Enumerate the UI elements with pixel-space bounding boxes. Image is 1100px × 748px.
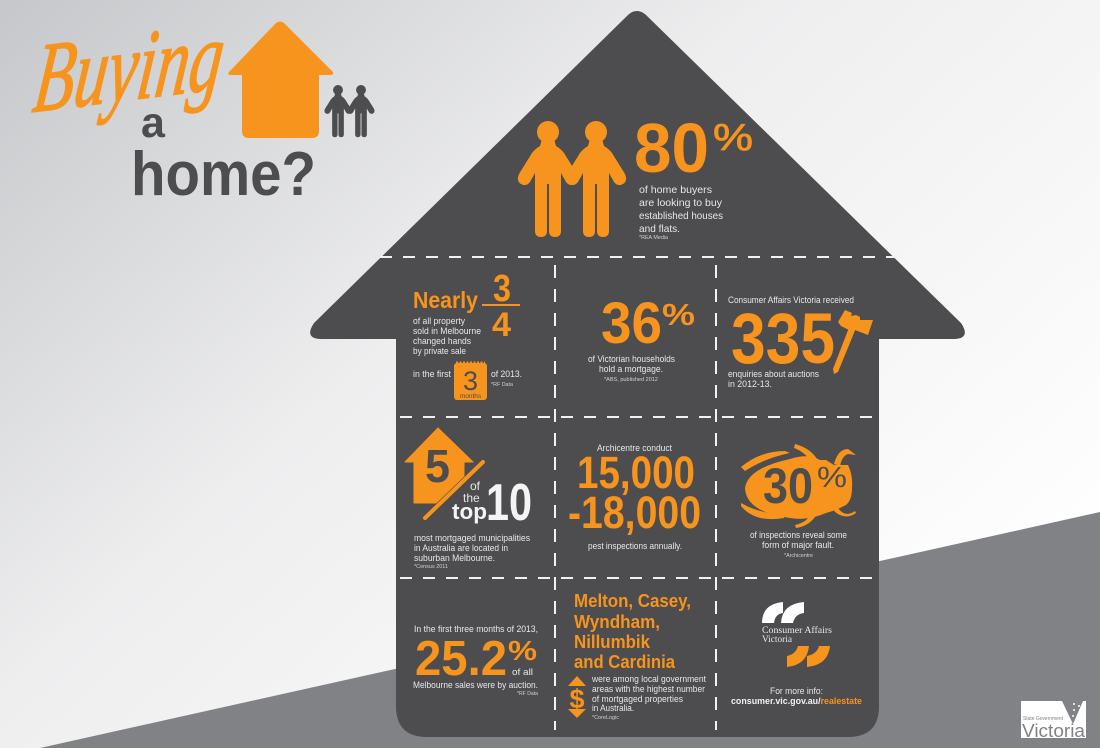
ground slope: [40, 512, 1100, 748]
text: of the top 10: the: [463, 491, 480, 505]
text block: of home buyers: [639, 184, 712, 196]
fraction: 3/4: 3: [493, 268, 511, 310]
text block: and flats.: [639, 223, 680, 235]
text block: enquiries about auctions: [728, 369, 819, 380]
logo: Consumer Affairs Victoria: [762, 602, 832, 667]
icon: gavel: [833, 310, 873, 374]
heading: Nearly: Nearly: [413, 287, 478, 313]
logo text: [762, 625, 832, 645]
text block: of inspections reveal some: [750, 530, 847, 541]
icon: dollar arrow: $: [569, 684, 585, 714]
icon: calendar: [454, 363, 487, 400]
house panel: [310, 11, 965, 737]
panel: 30% beetle: [741, 444, 856, 559]
logo: State Government Victoria: Victoria: [1022, 721, 1086, 741]
text: pest inspections annually.: pest inspections annually.: [588, 541, 682, 552]
fraction: 3/4: [482, 268, 520, 344]
text block: of 2013.: [491, 369, 522, 380]
icon: two people: [518, 121, 626, 237]
text block: sold in Melbourne: [413, 326, 481, 337]
text block: Melbourne sales were by auction.: [413, 680, 538, 691]
text block: *Archicentre: [784, 553, 813, 559]
text: of the top 10: 10: [486, 474, 532, 532]
stat: 80%: 80: [634, 109, 709, 187]
logo quote marks: white: [762, 602, 804, 623]
stat: 80%: [634, 109, 753, 187]
text block: *ABS, published 2012: [604, 377, 658, 383]
text block: *CoreLogic: [592, 715, 620, 721]
text block: changed hands: [413, 336, 471, 347]
heading: Wyndham,: [574, 612, 660, 632]
text block: *RF Data: [491, 382, 513, 388]
text: received: Consumer Affairs Victoria received: [728, 295, 854, 306]
panel: municipalities: [568, 591, 706, 721]
logo text: Victoria: [762, 635, 793, 645]
stat: 36%: 36: [601, 291, 662, 356]
text block: [414, 533, 530, 570]
stat: 335: 335: [731, 300, 835, 379]
text block: most mortgaged municipalities: [414, 533, 530, 544]
text block: areas with the highest number: [592, 684, 705, 695]
text block: *REA Media: [639, 235, 668, 241]
title icon: orange house: [228, 22, 333, 138]
logo: State Government Victoria: State Government: [1023, 716, 1064, 722]
text: for more info: For more info:: [770, 686, 823, 697]
stat: 25.2%: 25.2: [415, 632, 507, 686]
text block: [591, 674, 706, 721]
icon: calendar: months: [460, 393, 482, 400]
panel: 25.2%: [413, 624, 538, 697]
panel: 36%: [588, 291, 695, 383]
text: of the top 10: top: [452, 499, 487, 524]
link text: consumer.vic.gov.au/realestate: [731, 696, 862, 707]
text: of the top 10: of: [470, 479, 481, 493]
title icon: two people: [324, 85, 375, 137]
text block: form of major fault.: [762, 540, 834, 551]
fraction: 3/4: 4: [492, 306, 511, 344]
icon: house with 5: [405, 428, 473, 503]
text block: [413, 667, 538, 697]
panel: 80%: [518, 109, 753, 241]
stat: 36%: %: [662, 297, 695, 332]
text block: in 2012-13.: [728, 379, 772, 390]
panel: pest inspections: [568, 443, 701, 552]
text: Archicentre conduct: Archicentre conduct: [597, 443, 672, 454]
stat: 30%: %: [817, 462, 847, 494]
text block: [413, 316, 522, 388]
icon: beetle: [741, 444, 856, 528]
text block: were among local government: [591, 674, 706, 685]
stat: 15,000-18,000: 15,000: [577, 447, 695, 498]
dashed dividers: [380, 257, 896, 730]
heading: Melton, Casey,: [574, 591, 691, 611]
stat: 25.2%: %: [508, 635, 537, 666]
text block: established houses: [639, 210, 723, 222]
text block: in the first: [413, 369, 451, 380]
stat: 30%: [763, 458, 847, 514]
stat: 80%: %: [713, 117, 753, 159]
title word: home?: home?: [131, 140, 316, 209]
text block: *Census 2011: [414, 564, 448, 570]
logo quote marks: orange: [787, 646, 830, 667]
stat: 15,000-18,000: [568, 447, 701, 538]
text block: [639, 184, 723, 241]
heading: [574, 591, 691, 672]
panel: Consumer Affairs Victoria: [731, 602, 862, 707]
stat: 36%: [601, 291, 695, 356]
slash: [425, 462, 483, 518]
text block: *RF Data: [517, 691, 538, 697]
text block: by private sale: [413, 346, 466, 357]
stat: 30%: 30: [763, 458, 813, 514]
logo text: Consumer Affairs: [762, 625, 832, 636]
panel: 335 enquiries: [728, 295, 873, 390]
text block: [588, 354, 675, 383]
heading: and Cardinia: [574, 652, 676, 672]
logo: State Government Victoria: [1021, 701, 1086, 741]
text block: of Victorian households: [588, 354, 675, 365]
text block: of all property: [413, 316, 465, 327]
text block: [750, 530, 847, 559]
text block: are looking to buy: [639, 197, 723, 209]
stat: 15,000-18,000: -18,000: [568, 487, 701, 538]
text block: in Australia are located in: [414, 543, 508, 554]
text block: of mortgaged properties: [592, 694, 683, 705]
title word: a: a: [141, 99, 166, 147]
text block: hold a mortgage.: [599, 364, 663, 375]
text: of the top 10: [452, 474, 532, 532]
text: first three months: In the first three months of 2013,: [414, 624, 538, 635]
text block: in Australia.: [592, 703, 634, 714]
icon: house with 5: 5: [425, 440, 450, 492]
text block: [728, 369, 819, 390]
text block: of all: [512, 667, 533, 678]
panel: nearly three quarters: [413, 268, 522, 400]
title: [28, 0, 375, 209]
icon: calendar: 3: [463, 366, 478, 396]
panel: 5 of the top 10: [405, 428, 532, 570]
text block: suburban Melbourne.: [414, 553, 495, 564]
heading: Nillumbik: [574, 632, 651, 652]
